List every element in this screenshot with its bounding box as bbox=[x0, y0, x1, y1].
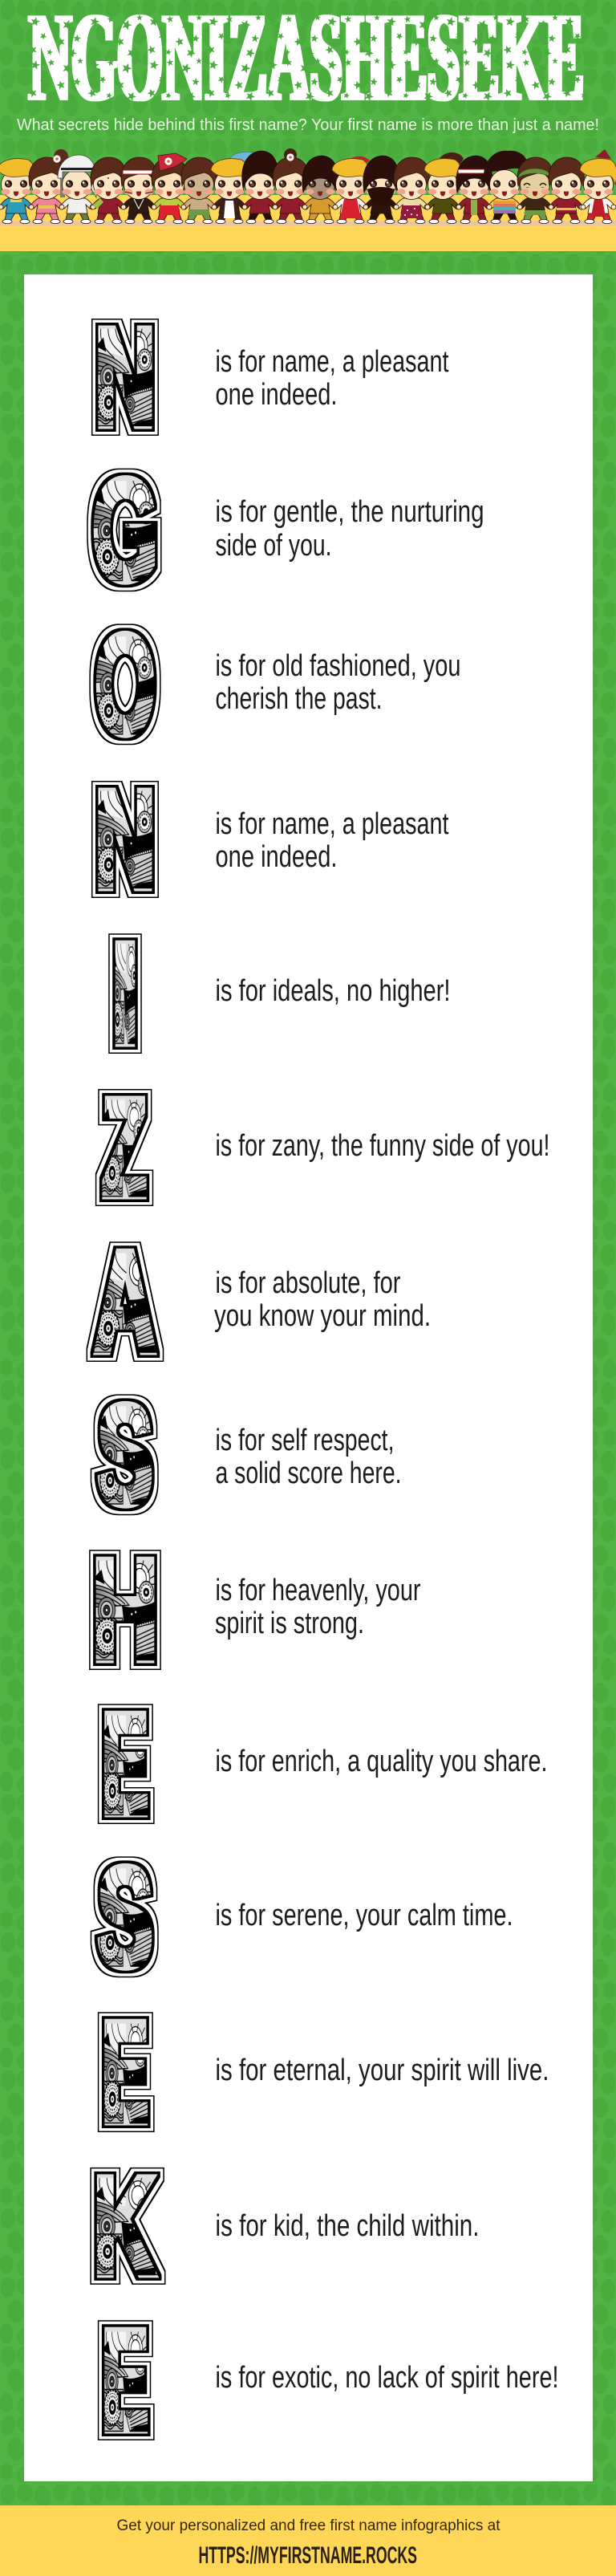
caption H bbox=[215, 1574, 421, 1640]
caption S bbox=[215, 1424, 401, 1490]
letter I: I bbox=[111, 912, 140, 1074]
row: H bbox=[92, 1530, 421, 1690]
letter N: N bbox=[95, 298, 156, 456]
letter G: G bbox=[92, 449, 158, 611]
character: tall black hair, maroon suit bbox=[242, 151, 278, 224]
footer line: Get your personalized and free first name infographics at bbox=[117, 2517, 500, 2534]
caption A: you know your mind. bbox=[214, 1299, 431, 1333]
row: Z bbox=[102, 1069, 550, 1226]
caption G bbox=[215, 495, 484, 563]
character: blonde with blue cap and apron bbox=[211, 152, 253, 224]
row: E bbox=[102, 2301, 558, 2461]
caption S: is for serene, your calm time. bbox=[215, 1899, 513, 1932]
caption N: one indeed. bbox=[215, 840, 337, 874]
caption N: is for name, a pleasant bbox=[215, 807, 449, 841]
row: I bbox=[111, 912, 450, 1074]
caption O bbox=[215, 649, 460, 716]
row: A bbox=[94, 1222, 431, 1383]
caption I: is for ideals, no higher! bbox=[215, 974, 451, 1008]
letter H: H bbox=[92, 1530, 158, 1690]
character: white headscarf bbox=[58, 155, 96, 224]
caption S: a solid score here. bbox=[215, 1457, 401, 1490]
caption O: is for old fashioned, you bbox=[215, 649, 460, 683]
caption N: one indeed. bbox=[215, 378, 337, 412]
letter O: O bbox=[95, 606, 156, 764]
caption N bbox=[215, 345, 449, 412]
caption G: side of you. bbox=[215, 529, 332, 563]
row: E bbox=[102, 1684, 547, 1845]
character: flower bun, maroon suit bbox=[273, 148, 308, 224]
caption A bbox=[214, 1266, 431, 1333]
row: S bbox=[97, 1838, 513, 1996]
letter K: K bbox=[93, 2147, 156, 2304]
character: blonde in blue overalls bbox=[0, 159, 34, 224]
row: N bbox=[95, 298, 449, 456]
row: N bbox=[95, 760, 449, 918]
character: spiky hair, rainbow shirt bbox=[484, 151, 528, 224]
character: headband, maroon with green stripe bbox=[456, 156, 492, 224]
letter S: S bbox=[97, 1375, 153, 1534]
character: maroon robe, yellow belt bbox=[549, 157, 584, 224]
character: dark skin, gold outfit bbox=[302, 156, 338, 224]
row: G bbox=[92, 449, 484, 611]
character: tan skin with grass skirt bbox=[181, 157, 217, 224]
character: green headdress, grass skirt bbox=[517, 157, 553, 224]
letter A: A bbox=[94, 1222, 156, 1383]
character: black hair and beard bbox=[363, 156, 399, 224]
letter E: E bbox=[102, 1993, 148, 2153]
row of walking characters bbox=[0, 148, 616, 224]
white content panel bbox=[24, 274, 593, 2481]
caption O: cherish the past. bbox=[215, 682, 382, 716]
character: polka skirt bbox=[394, 157, 429, 224]
caption K: is for kid, the child within. bbox=[215, 2209, 480, 2243]
character: blonde, white sleeves and red outfit bbox=[580, 149, 616, 224]
character: black tunic with headband bbox=[121, 157, 156, 224]
yellow band behind characters bbox=[0, 195, 616, 251]
character: blonde, red dress bbox=[332, 156, 370, 224]
character: blonde, olive and maroon bbox=[424, 152, 464, 224]
letter S: S bbox=[97, 1838, 153, 1996]
footer url: HTTPS://MYFIRSTNAME.ROCKS bbox=[199, 2542, 417, 2569]
row: O bbox=[95, 606, 460, 764]
caption A: is for absolute, for bbox=[215, 1266, 401, 1300]
caption S: is for self respect, bbox=[215, 1424, 395, 1457]
character: maroon robe with green shoulders bbox=[91, 157, 126, 224]
caption N bbox=[215, 807, 449, 874]
footer bbox=[0, 2505, 616, 2576]
caption H: is for heavenly, your bbox=[215, 1574, 421, 1607]
caption N: is for name, a pleasant bbox=[215, 345, 449, 379]
character: pink kimono with flower bun bbox=[29, 149, 68, 224]
letter Z: Z bbox=[102, 1069, 147, 1226]
letter E: E bbox=[102, 2301, 148, 2461]
character: red hat and red skirt bbox=[152, 153, 187, 224]
letter N: N bbox=[95, 760, 156, 918]
caption G: is for gentle, the nurturing bbox=[215, 495, 484, 529]
letter E: E bbox=[102, 1684, 148, 1845]
caption H: spirit is strong. bbox=[215, 1607, 364, 1640]
row: E bbox=[102, 1993, 549, 2153]
row: S bbox=[97, 1375, 401, 1534]
row: K bbox=[93, 2147, 480, 2304]
subtitle: What secrets hide behind this first name? Your first name is more than just a name! bbox=[17, 116, 599, 134]
